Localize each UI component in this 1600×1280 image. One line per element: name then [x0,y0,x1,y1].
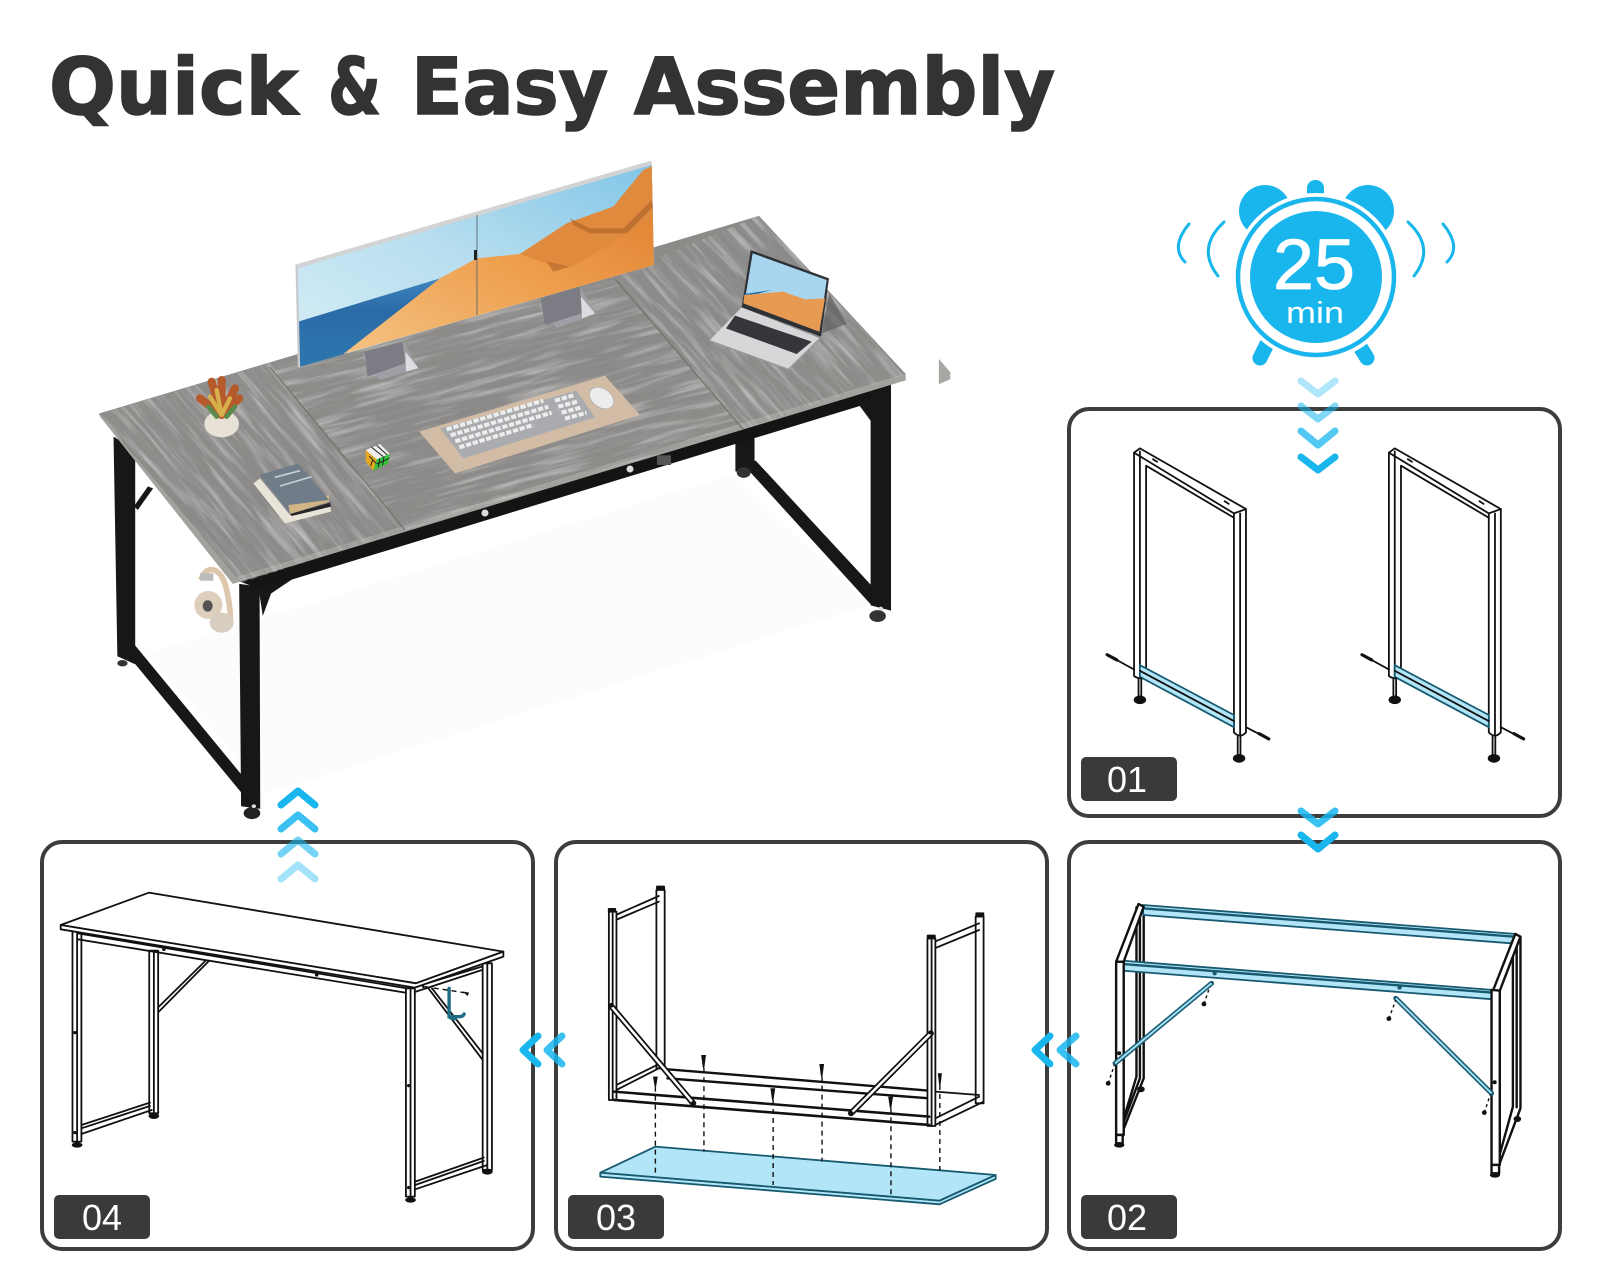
monitors and stands [293,160,657,380]
title [49,43,1055,133]
icon: alarm clock 25 min: 25 [1273,226,1355,305]
arrow: chevrons step 02 to 03 [1035,1036,1076,1064]
monitor screen [293,160,657,370]
arrow: chevrons step 03 to 04 [523,1036,562,1064]
books [253,463,331,523]
keyboard [440,391,595,458]
assembly drawing 03 [600,886,996,1204]
floor shadow [147,474,867,793]
laptop [709,250,847,369]
panel 01 [1069,409,1560,816]
panel 03 [556,842,1047,1249]
arrow: chevrons clock to step 01 [1301,381,1335,470]
screws on apron [482,511,488,516]
clock bells and feet [1239,180,1394,358]
title: Assembly [634,43,1055,133]
badge 03 [568,1195,664,1239]
badge 01 [1081,757,1177,801]
front left leg [239,584,260,809]
panel 02 [1069,842,1560,1249]
arrow: chevrons step 01 to 02 [1301,811,1335,849]
alarm ring lines [1178,222,1454,276]
assembly drawing 04 [61,893,503,1203]
front apron [239,385,891,589]
icon: alarm clock 25 min [1178,180,1454,361]
rubik's cube [366,444,390,471]
badge 02: 02 [1107,1197,1147,1238]
assembly drawing 02 [1106,904,1521,1178]
arrow: chevrons step 04 to desk [281,791,315,879]
title: & [328,43,381,133]
mouse [585,383,618,413]
badge 03: 03 [596,1197,636,1238]
plant pot [200,380,239,437]
wood grain texture [104,216,906,583]
desk accessories [194,376,640,633]
back legs and lower rails [114,437,873,794]
badge 04 [54,1195,150,1239]
tabletop board [600,1147,996,1204]
desk product photo [99,216,950,819]
desk apron screws [482,466,634,516]
keyboard mat [419,376,640,473]
panel 04 [42,842,533,1249]
desktop seams [270,279,743,530]
title: Quick [49,43,300,133]
monitor stands [362,342,418,380]
front right leg [871,386,891,611]
small grey artifact [939,359,950,384]
assembly drawing 01 [1106,448,1524,763]
title: Easy [411,43,608,133]
badge 04: 04 [82,1197,122,1238]
badge 01: 01 [1107,759,1147,800]
headphones [194,570,234,633]
icon: alarm clock 25 min: min [1286,295,1344,330]
badge 02 [1081,1195,1177,1239]
desktop surface [99,216,906,577]
hook [449,988,464,1019]
